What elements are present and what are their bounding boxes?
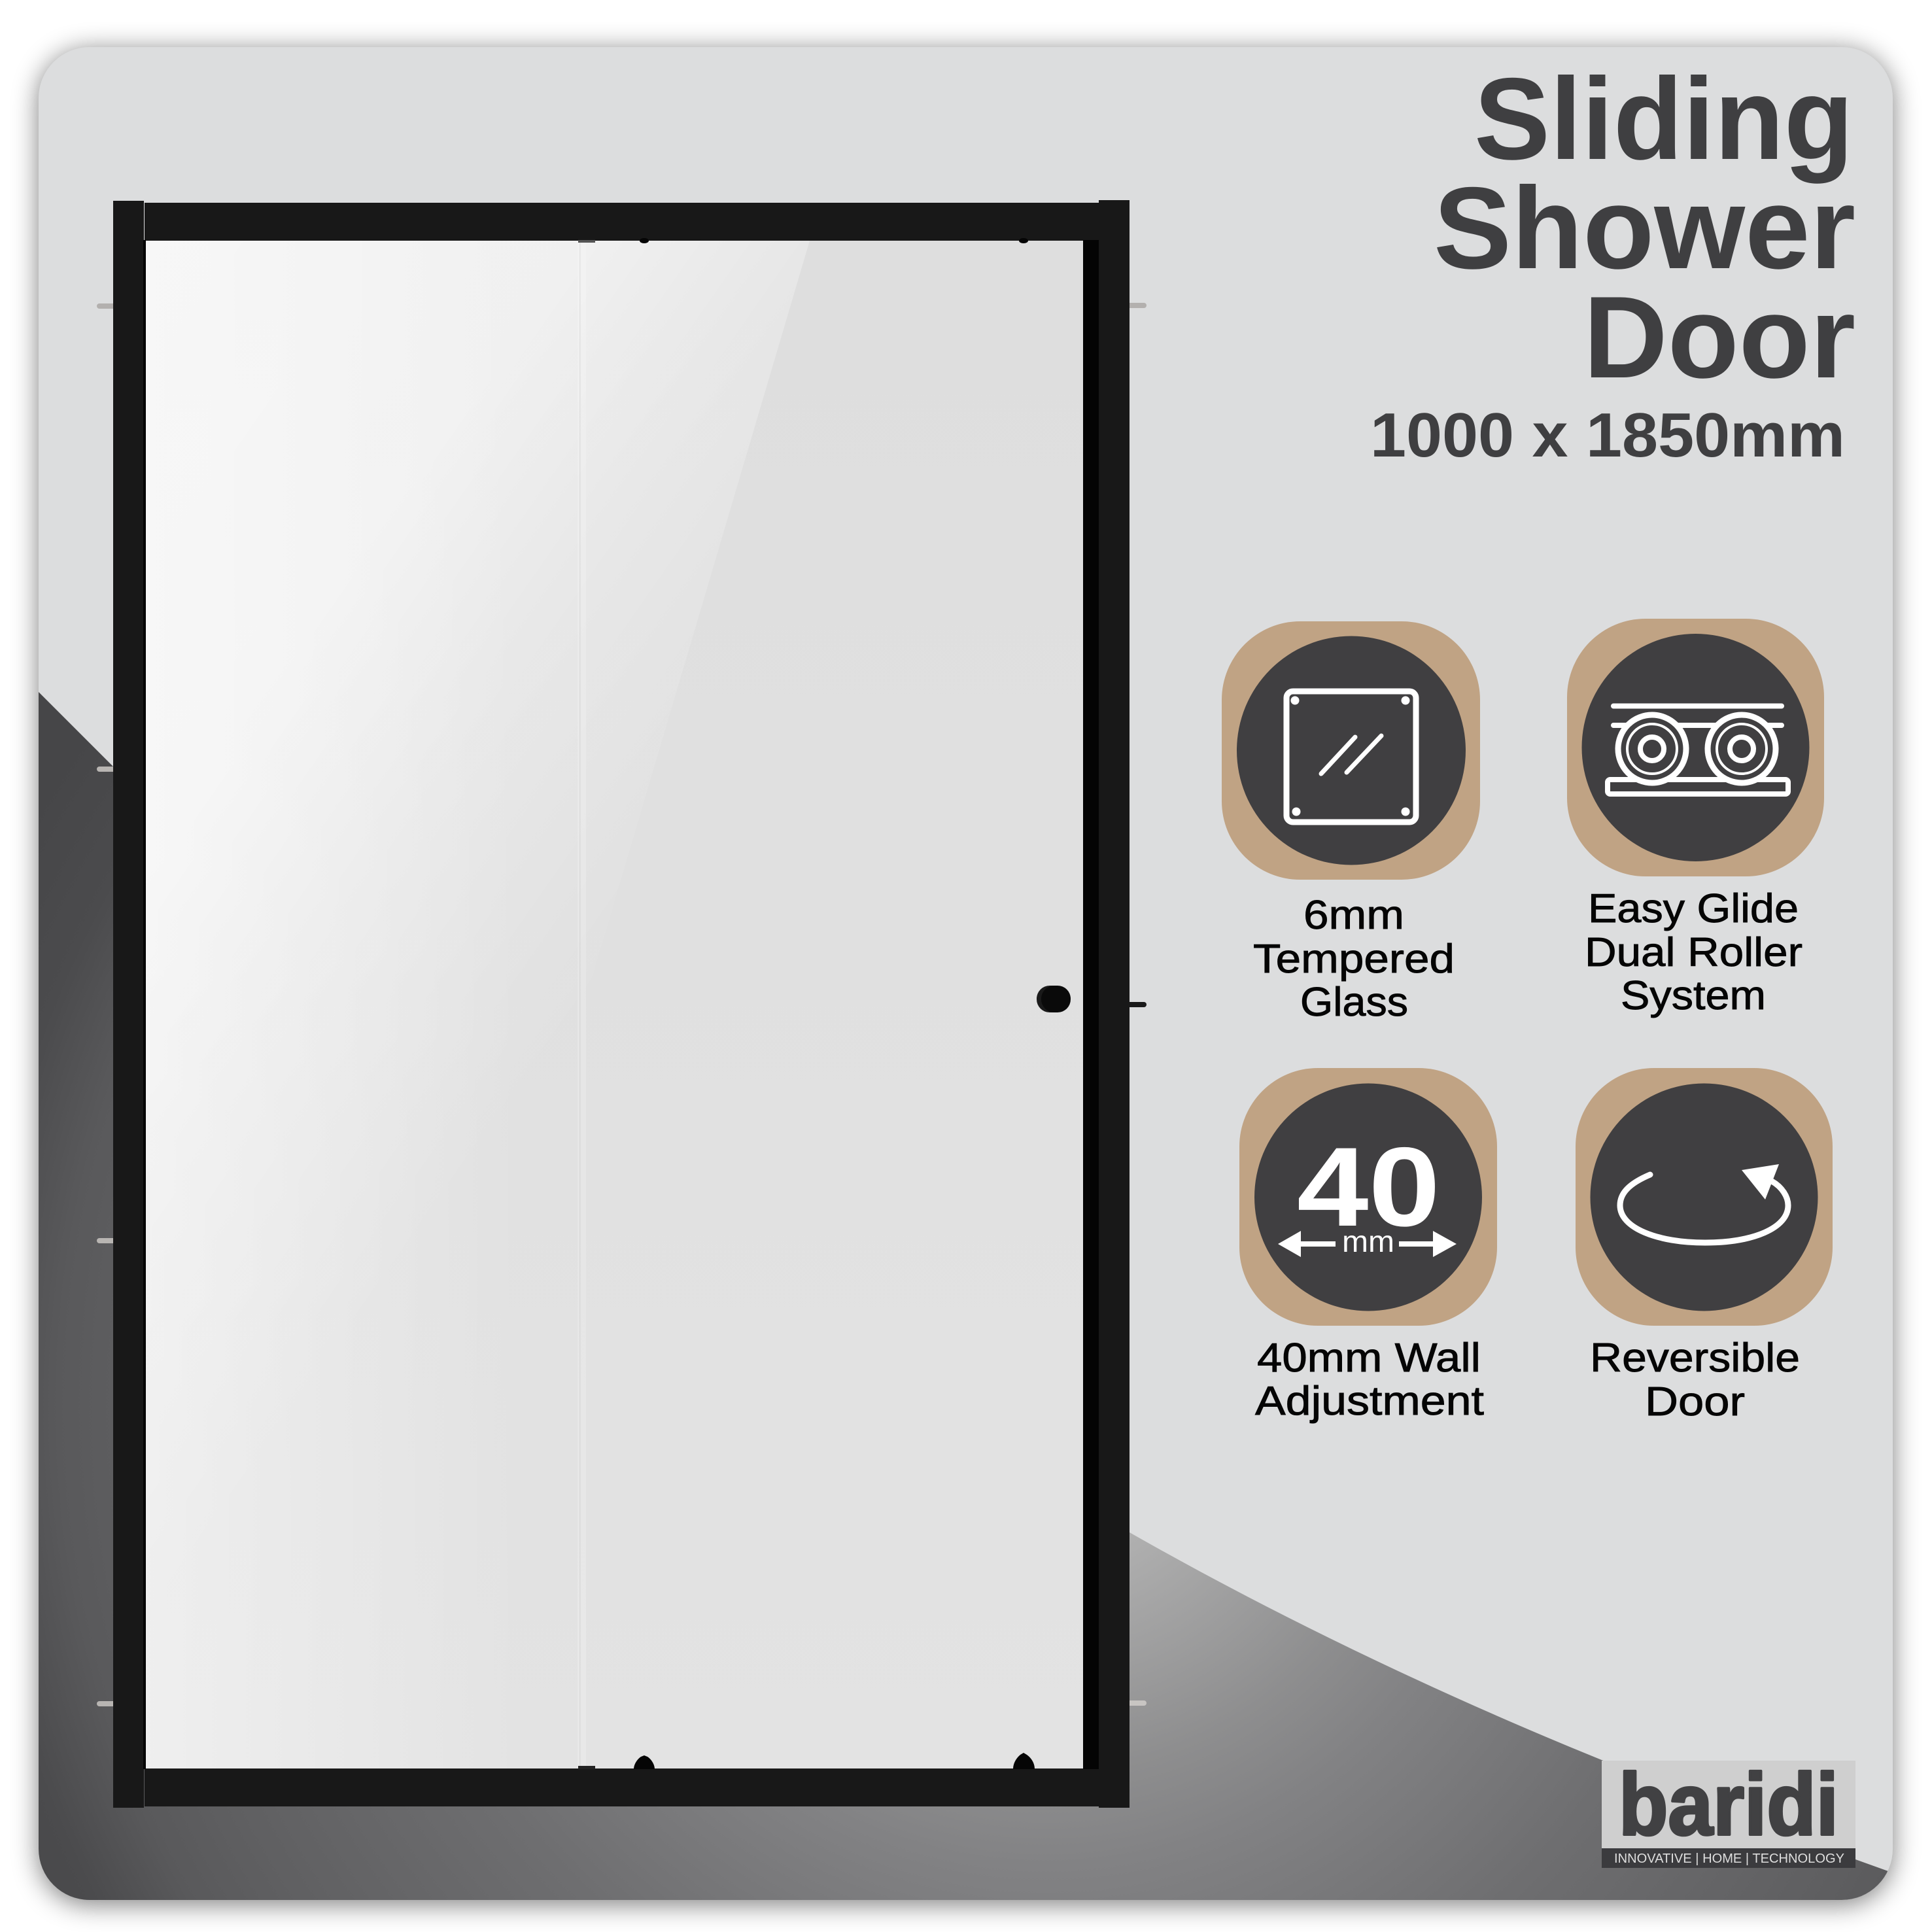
icon: rotation arrow bbox=[1576, 1068, 1833, 1326]
label: Tempered bbox=[1253, 937, 1455, 982]
icon: dual rollers bbox=[1567, 619, 1824, 876]
feature: reversible door bbox=[1576, 1068, 1833, 1424]
feature: 6mm tempered glass bbox=[1222, 621, 1480, 1025]
icon: 40 mm adjustment: 40 bbox=[1297, 1124, 1440, 1250]
label: 40mm Wall bbox=[1257, 1336, 1481, 1381]
logo wordmark: baridi bbox=[1619, 1756, 1838, 1854]
label: Door bbox=[1645, 1379, 1745, 1424]
label bbox=[1253, 893, 1455, 1025]
title bbox=[1434, 54, 1855, 402]
dark gradient floor shape bbox=[0, 654, 1932, 1932]
wall pins bbox=[97, 303, 1147, 1706]
label: 6mm bbox=[1303, 893, 1404, 938]
label bbox=[1585, 886, 1803, 1018]
rollers and seam hardware bbox=[578, 238, 1035, 1769]
label: System bbox=[1621, 973, 1766, 1018]
label: Adjustment bbox=[1255, 1379, 1484, 1424]
feature: easy glide dual roller system bbox=[1567, 619, 1824, 1018]
door frame bbox=[113, 200, 1130, 1808]
icon: glass pane bbox=[1222, 621, 1480, 880]
brand logo bbox=[1602, 1756, 1855, 1868]
label bbox=[1255, 1336, 1484, 1424]
glass panel bbox=[145, 240, 1084, 1769]
icon: 40 mm adjustment bbox=[1239, 1068, 1497, 1326]
door handle bbox=[1037, 986, 1071, 1012]
label bbox=[1590, 1336, 1800, 1424]
label: Reversible bbox=[1590, 1336, 1800, 1381]
label: Easy Glide bbox=[1588, 886, 1799, 931]
label: Dual Roller bbox=[1585, 930, 1803, 975]
subtitle: dimensions: 1000 x 1850mm bbox=[1370, 400, 1845, 470]
logo tagline: INNOVATIVE | HOME | TECHNOLOGY bbox=[1614, 1852, 1844, 1866]
feature: 40mm wall adjustment bbox=[1239, 1068, 1497, 1424]
label: Glass bbox=[1300, 980, 1408, 1025]
title: Shower bbox=[1434, 163, 1855, 293]
title: Door bbox=[1583, 272, 1855, 402]
title: Sliding bbox=[1474, 54, 1854, 184]
icon: 40 mm adjustment: mm bbox=[1342, 1224, 1394, 1258]
product: sliding shower door bbox=[97, 200, 1147, 1808]
